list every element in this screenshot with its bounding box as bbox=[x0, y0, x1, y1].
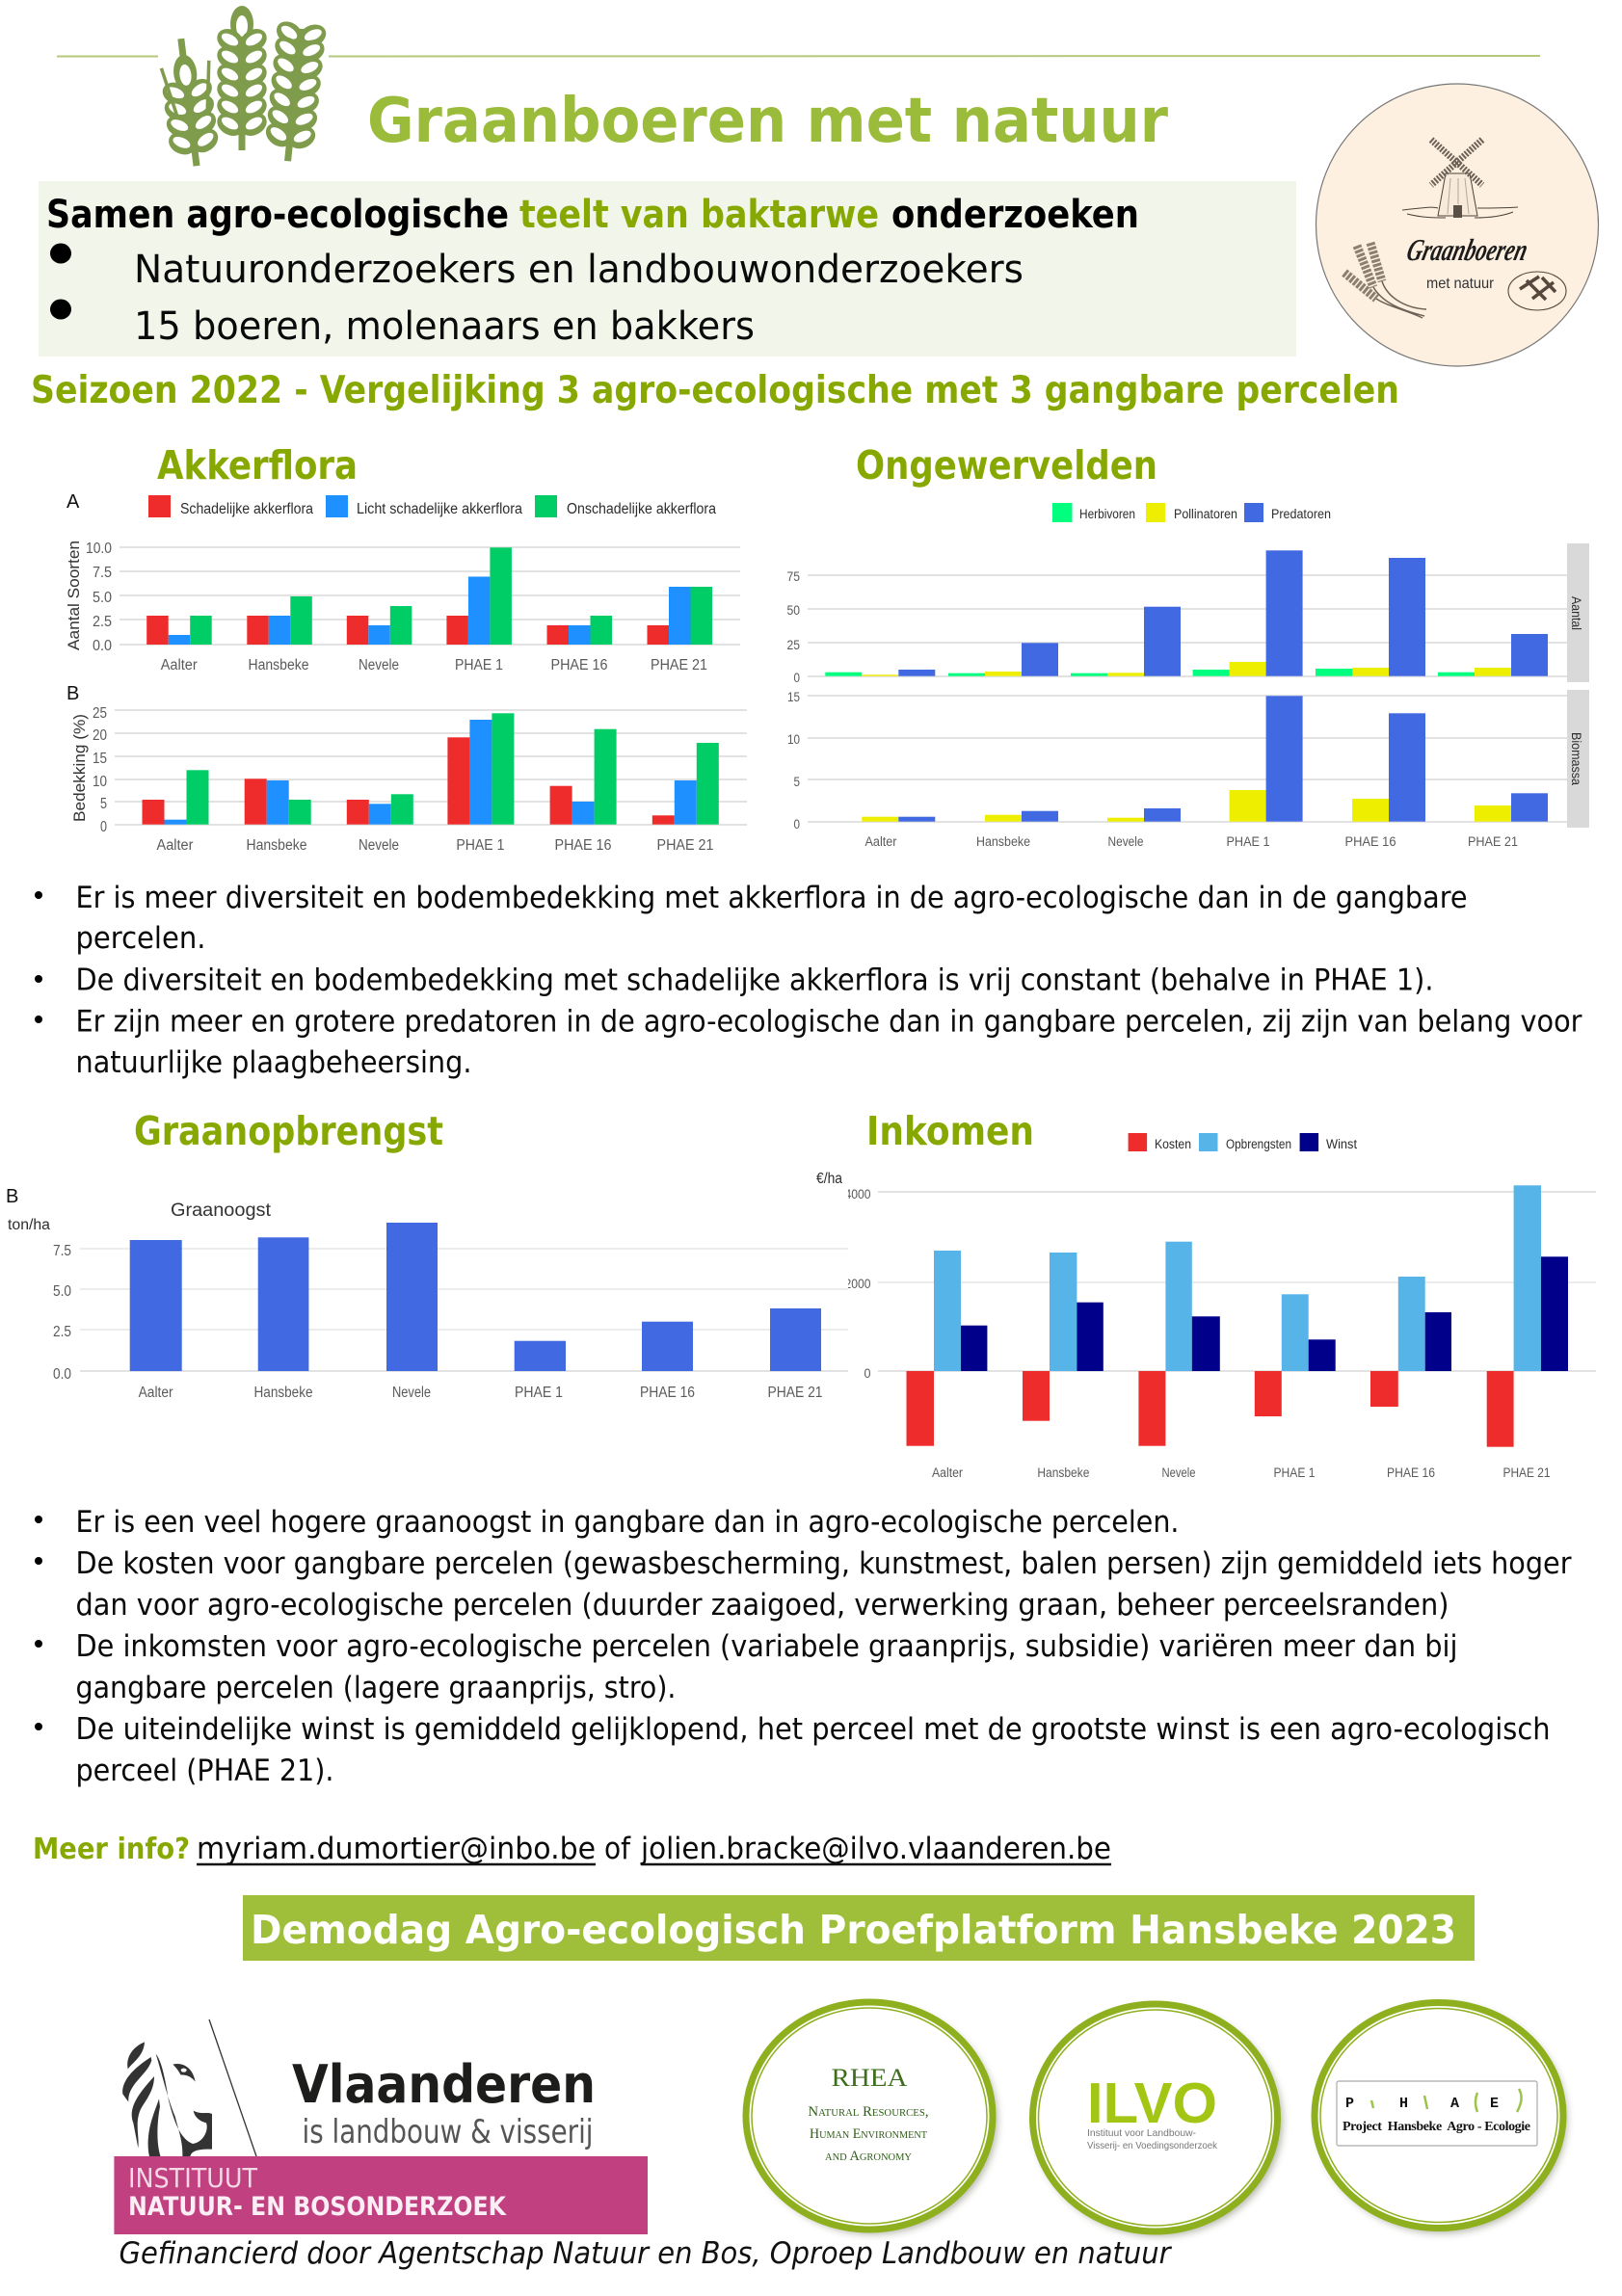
legend: akkerflora: Schadelijke akkerflora bbox=[180, 501, 313, 517]
text block: oogst en inkomen findings bbox=[35, 1505, 1572, 1788]
logo wordmark: Graanboeren bbox=[1403, 233, 1531, 268]
icon: Flemish lion bbox=[122, 2042, 212, 2156]
chart: graanoogst bbox=[6, 1186, 848, 1401]
facet: aantal: 25 bbox=[786, 638, 800, 652]
chart: graanoogst: 7.5 bbox=[53, 1243, 71, 1259]
icon: left wheat ear bbox=[152, 35, 226, 170]
banner: demodag: Demodag Agro-ecologisch Proefplatform Hansbeke 2023 bbox=[251, 1907, 1456, 1953]
legend: inkomen bbox=[1129, 1133, 1357, 1151]
bullet list bbox=[50, 243, 1024, 349]
header rule bbox=[57, 55, 1540, 58]
logo: INBO: INSTITUUT bbox=[128, 2162, 258, 2194]
heading: Inkomen: Inkomen bbox=[866, 1108, 1034, 1154]
badge: RHEA: RHEA bbox=[831, 2064, 908, 2092]
intro heading: teelt van baktarwe bbox=[519, 193, 879, 237]
chart A: aantal soorten: PHAE 16 bbox=[551, 657, 607, 673]
logo: Vlaanderen bbox=[122, 2019, 596, 2156]
icon: windmill bbox=[1402, 140, 1518, 218]
title: Graanboeren met natuur bbox=[367, 86, 1168, 157]
badge: RHEA bbox=[746, 2002, 997, 2234]
funding note: Gefinancierd door Agentschap Natuur en Bos, Oproep Landbouw en natuur bbox=[120, 2236, 1173, 2271]
chart: graanoogst: Nevele bbox=[392, 1385, 431, 1401]
x axis labels: Aalter bbox=[865, 834, 897, 849]
badge: RHEA: and Agronomy bbox=[825, 2149, 912, 2164]
chart A: aantal soorten: 7.5 bbox=[93, 565, 112, 581]
legend: ongewervelden: Predatoren bbox=[1271, 507, 1331, 521]
panel: akkerflora charts bbox=[65, 491, 747, 854]
chart A: aantal soorten: 0.0 bbox=[93, 638, 112, 654]
badge: RHEA: Human Environment bbox=[810, 2126, 927, 2142]
facet: aantal: Aantal bbox=[1569, 596, 1583, 630]
badge: PHAE: Project Hansbeke Agro - Ecologie bbox=[1343, 2120, 1530, 2134]
logo: Vlaanderen: is landbouw & visserij bbox=[303, 2113, 594, 2151]
facet: biomassa: 0 bbox=[794, 817, 800, 831]
facet: aantal bbox=[786, 543, 1589, 685]
bullet list: 15 boeren, molenaars en bakkers bbox=[134, 304, 755, 349]
chart B: bedekking: Hansbeke bbox=[247, 837, 306, 854]
chart B: bedekking: PHAE 16 bbox=[555, 837, 611, 854]
x axis labels: Nevele bbox=[1108, 834, 1143, 849]
heading: Graanopbrengst: Graanopbrengst bbox=[134, 1108, 443, 1154]
panel: ongewervelden chart bbox=[786, 503, 1589, 849]
icon: wheat ears bbox=[152, 6, 332, 170]
chart: inkomen: 0 bbox=[864, 1366, 871, 1381]
chart: inkomen: Hansbeke bbox=[1037, 1465, 1089, 1480]
chart B: bedekking bbox=[66, 683, 747, 854]
facet: aantal: 50 bbox=[786, 603, 800, 618]
legend: ongewervelden: Pollinatoren bbox=[1174, 507, 1237, 521]
chart A: aantal soorten: Aantal Soorten bbox=[65, 541, 83, 650]
intro heading: onderzoeken bbox=[891, 193, 1139, 237]
facet: biomassa: 10 bbox=[787, 732, 800, 747]
chart: inkomen: Aalter bbox=[932, 1465, 963, 1480]
chart: inkomen: €/ha bbox=[816, 1171, 842, 1187]
chart: graanoogst: 5.0 bbox=[53, 1283, 71, 1300]
x axis labels: Hansbeke bbox=[976, 834, 1030, 849]
heading: Akkerflora: Akkerflora bbox=[157, 442, 358, 488]
facet: biomassa: 5 bbox=[794, 775, 800, 789]
chart: graanoogst: PHAE 21 bbox=[767, 1385, 823, 1401]
facet: biomassa: Biomassa bbox=[1569, 732, 1583, 785]
chart B: bedekking: 15 bbox=[93, 751, 107, 767]
chart: inkomen bbox=[816, 1133, 1596, 1480]
chart: graanoogst: B bbox=[6, 1186, 18, 1207]
chart B: bedekking: Aalter bbox=[156, 837, 193, 854]
icon: centre wheat ear bbox=[213, 6, 271, 150]
chart A: aantal soorten: Aalter bbox=[161, 657, 198, 673]
badge: PHAE: A bbox=[1450, 2096, 1459, 2112]
panel: intro box bbox=[39, 181, 1296, 356]
chart: graanoogst: 2.5 bbox=[53, 1324, 71, 1340]
legend: akkerflora: Onschadelijke akkerflora bbox=[567, 501, 716, 517]
chart A: aantal soorten: PHAE 1 bbox=[455, 657, 503, 673]
icon: right wheat ear bbox=[259, 15, 332, 164]
chart: graanoogst: 0.0 bbox=[53, 1366, 71, 1383]
heading: Ongewervelden: Ongewervelden bbox=[856, 442, 1157, 488]
badge: PHAE: H bbox=[1399, 2096, 1408, 2112]
chart: inkomen: 2000 bbox=[844, 1277, 871, 1291]
chart A: aantal soorten bbox=[65, 491, 740, 673]
facet: aantal: 75 bbox=[786, 569, 800, 584]
icon: bread bbox=[1508, 272, 1566, 310]
text block: oogst en inkomen findings: De uiteindelijke winst is gemiddeld gelijklopend, het perceel met de grootste winst is een agro-ecologisch bbox=[75, 1712, 1550, 1747]
facet: biomassa: 15 bbox=[787, 690, 800, 704]
chart A: aantal soorten: Hansbeke bbox=[249, 657, 308, 673]
chart A: aantal soorten: Nevele bbox=[359, 657, 399, 673]
badge: RHEA: Natural Resources, bbox=[808, 2104, 929, 2120]
chart B: bedekking: B bbox=[66, 683, 79, 704]
legend: inkomen: Opbrengsten bbox=[1226, 1137, 1291, 1151]
chart B: bedekking: 25 bbox=[93, 705, 107, 722]
chart B: bedekking: PHAE 1 bbox=[456, 837, 504, 854]
chart A: aantal soorten: 10.0 bbox=[86, 541, 112, 557]
chart: graanoogst: Aalter bbox=[139, 1385, 173, 1401]
logo: INBO: NATUUR- EN BOSONDERZOEK bbox=[128, 2192, 507, 2222]
chart A: aantal soorten: 2.5 bbox=[93, 614, 112, 630]
chart: graanoogst: PHAE 1 bbox=[515, 1385, 563, 1401]
x axis labels: PHAE 16 bbox=[1345, 834, 1396, 849]
chart: graanoogst: ton/ha bbox=[8, 1217, 50, 1233]
season heading: Seizoen 2022 - Vergelijking 3 agro-ecologische met 3 gangbare percelen bbox=[31, 369, 1399, 412]
icon: wheat sheaf bbox=[1344, 243, 1426, 318]
facet: aantal: 0 bbox=[794, 671, 800, 685]
logo: INBO bbox=[114, 2156, 648, 2234]
text block: akkerflora and ongewervelden findings: natuurlijke plaagbeheersing. bbox=[75, 1045, 472, 1080]
logo subtitle: met natuur bbox=[1426, 276, 1495, 292]
legend: ongewervelden bbox=[1052, 503, 1331, 522]
badge: ILVO bbox=[1033, 2004, 1283, 2236]
contact line: Meer info? bbox=[33, 1833, 190, 1866]
chart A: aantal soorten: A bbox=[66, 491, 80, 513]
logo: Vlaanderen: Vlaanderen bbox=[292, 2054, 596, 2115]
logo: Graanboeren badge bbox=[1316, 84, 1598, 366]
contact line bbox=[33, 1832, 1111, 1866]
chart A: aantal soorten: 5.0 bbox=[93, 590, 112, 606]
text block: oogst en inkomen findings: perceel (PHAE 21). bbox=[75, 1754, 333, 1788]
text block: akkerflora and ongewervelden findings: Er is meer diversiteit en bodembedekking met akkerflora in de agro-ecologische dan in de gangbare bbox=[75, 881, 1467, 915]
intro heading: Samen agro-ecologische bbox=[46, 193, 509, 237]
bullet list: Natuuronderzoekers en landbouwonderzoekers bbox=[134, 248, 1024, 292]
text block: oogst en inkomen findings: dan voor agro-ecologische percelen (duurder zaaigoed, verwerking graan, beheer perceelsranden) bbox=[75, 1588, 1449, 1623]
text block: akkerflora and ongewervelden findings bbox=[35, 881, 1582, 1080]
banner: demodag bbox=[243, 1895, 1475, 1961]
chart B: bedekking: 10 bbox=[93, 774, 107, 790]
legend: akkerflora: Licht schadelijke akkerflora bbox=[357, 501, 522, 517]
chart B: bedekking: PHAE 21 bbox=[657, 837, 713, 854]
text block: oogst en inkomen findings: Er is een veel hogere graanoogst in gangbare dan in agro-ecologische percelen. bbox=[75, 1505, 1180, 1540]
chart B: bedekking: 20 bbox=[93, 727, 107, 744]
badge: PHAE: E bbox=[1490, 2096, 1499, 2112]
chart: graanoogst: PHAE 16 bbox=[640, 1385, 695, 1401]
legend: ongewervelden: Herbivoren bbox=[1079, 507, 1135, 521]
legend: inkomen: Winst bbox=[1326, 1137, 1357, 1151]
text block: akkerflora and ongewervelden findings: De diversiteit en bodembedekking met schadelijke akkerflora is vrij constant (behalve in PHAE 1). bbox=[75, 963, 1434, 998]
contact line: of bbox=[604, 1832, 631, 1866]
text block: akkerflora and ongewervelden findings: percelen. bbox=[75, 921, 206, 956]
chart: inkomen: 4000 bbox=[844, 1187, 871, 1201]
chart B: bedekking: 0 bbox=[100, 819, 107, 835]
chart B: bedekking: Nevele bbox=[359, 837, 399, 854]
badge: ILVO: Visserij- en Voedingsonderzoek bbox=[1087, 2140, 1218, 2151]
intro heading bbox=[46, 193, 1139, 237]
badge: ILVO: Instituut voor Landbouw- bbox=[1087, 2127, 1196, 2139]
x axis labels: PHAE 21 bbox=[1468, 834, 1518, 849]
text block: oogst en inkomen findings: De inkomsten voor agro-ecologische percelen (variabele graanprijs, subsidie) variëren meer dan bij bbox=[75, 1629, 1457, 1664]
contact line: myriam.dumortier@inbo.be bbox=[197, 1832, 596, 1866]
badge: PHAE: P bbox=[1345, 2096, 1354, 2112]
chart: graanoogst: Hansbeke bbox=[254, 1385, 312, 1401]
text block: oogst en inkomen findings: gangbare percelen (lagere graanprijs, stro). bbox=[75, 1671, 677, 1705]
chart: graanoogst: Graanoogst bbox=[171, 1201, 272, 1221]
chart: inkomen: PHAE 21 bbox=[1503, 1465, 1550, 1480]
chart B: bedekking: Bedekking (%) bbox=[70, 714, 89, 822]
x axis labels bbox=[865, 834, 1518, 849]
facet: biomassa bbox=[787, 690, 1589, 831]
legend: akkerflora bbox=[148, 495, 716, 517]
badge: PHAE bbox=[1315, 2002, 1567, 2233]
chart: inkomen: PHAE 16 bbox=[1387, 1465, 1435, 1480]
chart: inkomen: Nevele bbox=[1162, 1465, 1195, 1480]
chart: inkomen: PHAE 1 bbox=[1274, 1465, 1315, 1480]
x axis labels: PHAE 1 bbox=[1226, 834, 1270, 849]
chart B: bedekking: 5 bbox=[100, 796, 107, 812]
legend: inkomen: Kosten bbox=[1155, 1137, 1191, 1151]
chart A: aantal soorten: PHAE 21 bbox=[651, 657, 707, 673]
contact line: jolien.bracke@ilvo.vlaanderen.be bbox=[640, 1832, 1111, 1866]
badge: ILVO: ILVO bbox=[1087, 2072, 1217, 2135]
